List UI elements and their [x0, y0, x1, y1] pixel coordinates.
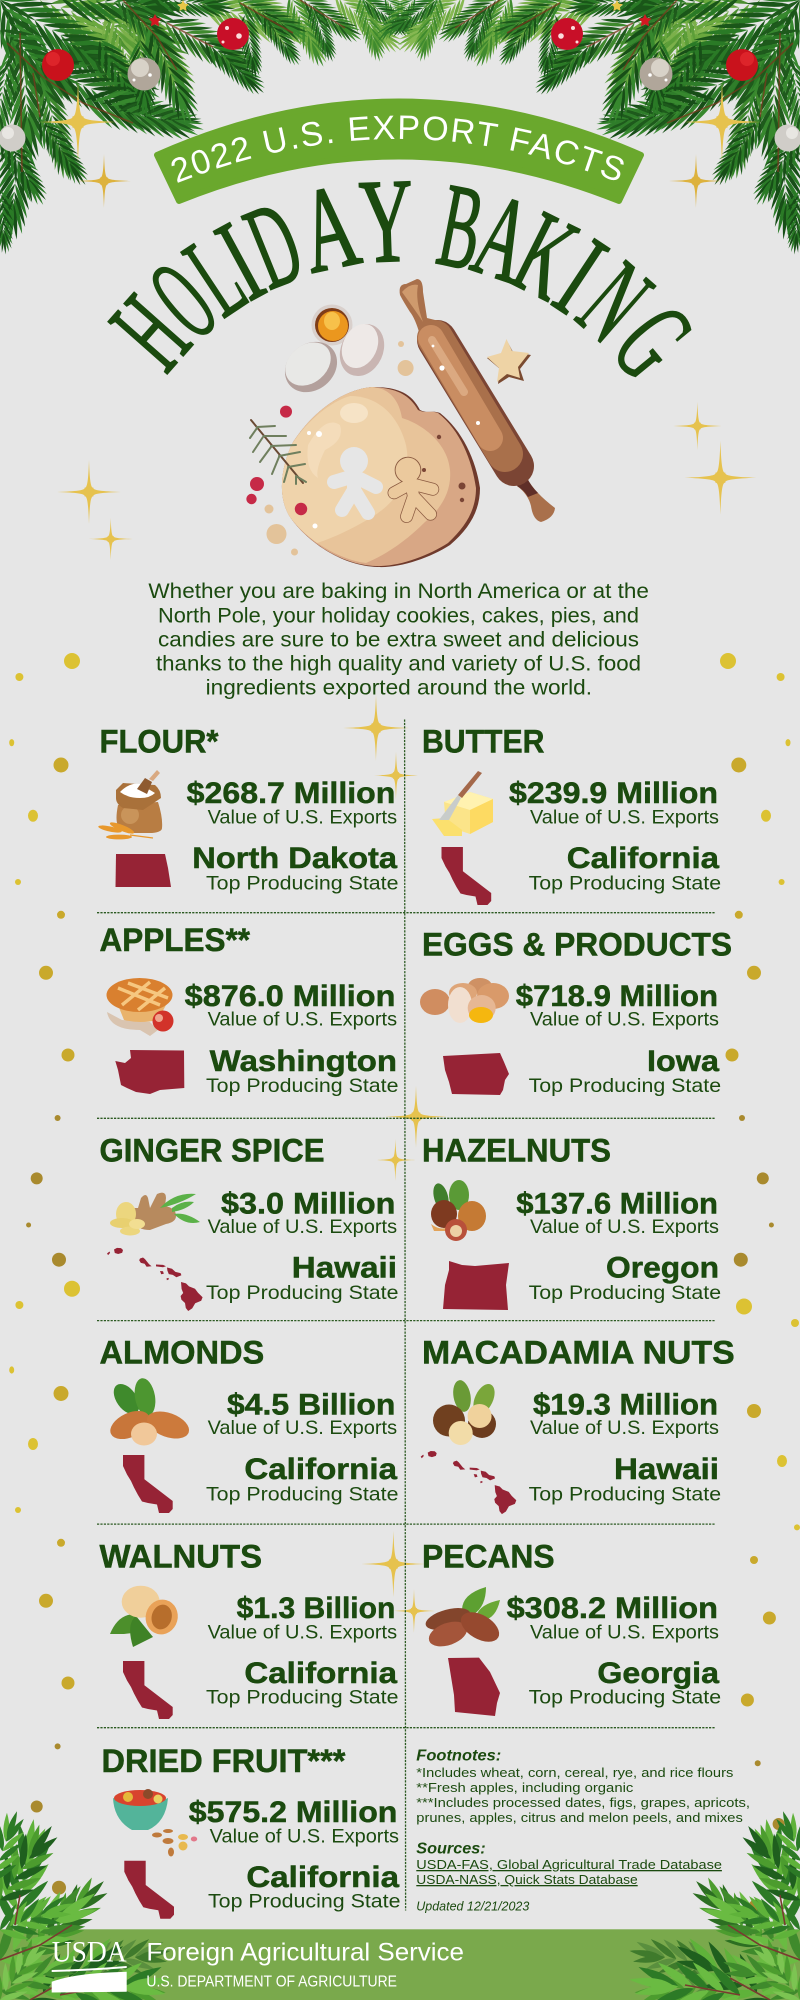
sources heading: Sources: — [416, 1840, 486, 1857]
label: Value of U.S. Exports — [530, 1622, 719, 1644]
panel: macadamia nuts — [421, 1335, 735, 1514]
label: Top Producing State — [529, 1075, 721, 1097]
heading: WALNUTS — [100, 1539, 262, 1575]
label: Top Producing State — [206, 872, 398, 894]
state map — [124, 1861, 174, 1919]
label: Top Producing State — [206, 1484, 398, 1506]
gold sparkles — [57, 402, 756, 1633]
source links — [416, 1857, 722, 1887]
state name: Oregon — [606, 1252, 719, 1284]
state name: Hawaii — [292, 1252, 397, 1284]
state map — [107, 1248, 203, 1311]
label: Value of U.S. Exports — [208, 806, 397, 828]
ornament: silver bauble — [128, 58, 160, 90]
title: holiday baking: Y — [357, 153, 416, 289]
logo swoosh — [52, 1966, 127, 1992]
title: holiday baking: I — [534, 215, 627, 338]
title: holiday baking: B — [429, 157, 494, 296]
value: $4.5 Billion — [227, 1388, 395, 1421]
egg: white — [275, 331, 347, 403]
label: Value of U.S. Exports — [208, 1417, 397, 1439]
state name: Washington — [210, 1045, 397, 1078]
label: Top Producing State — [529, 872, 721, 894]
title: holiday baking: K — [495, 185, 597, 325]
label: Value of U.S. Exports — [530, 1417, 719, 1439]
icon: butter — [432, 771, 493, 836]
panel: flour — [98, 724, 398, 894]
ornament: gold star — [177, 0, 189, 11]
title: holiday baking: D — [229, 174, 319, 315]
footnote lines: ***Includes processed dates, figs, grapes, apricots, — [416, 1795, 750, 1810]
label: Value of U.S. Exports — [530, 1008, 719, 1030]
dough — [282, 387, 480, 567]
gold glitter dots — [9, 653, 800, 1912]
heading: PECANS — [422, 1539, 555, 1575]
state map — [421, 1451, 516, 1514]
state map — [115, 1050, 184, 1094]
gingerbread outline — [387, 453, 438, 521]
label: Top Producing State — [529, 1687, 721, 1709]
panel: walnuts — [100, 1539, 398, 1719]
state name: California — [244, 1453, 397, 1486]
state name: California — [246, 1861, 399, 1894]
footnote lines: *Includes wheat, corn, cereal, rye, and rice flours — [416, 1765, 734, 1780]
footer band — [0, 1929, 800, 2000]
banner ribbon — [157, 102, 641, 201]
intro text: thanks to the high quality and variety of U.S. food — [156, 652, 641, 676]
icon: dried fruit bowl — [113, 1789, 197, 1856]
ornament: red bauble — [42, 49, 74, 81]
banner — [154, 98, 644, 204]
updated date: Updated 12/21/2023 — [416, 1900, 529, 1914]
ornaments: left — [0, 0, 249, 208]
banner text: 2022 U.S. EXPORT FACTS — [172, 116, 624, 183]
garland: top left — [0, 0, 430, 256]
footnote lines — [416, 1765, 750, 1825]
heading: ALMONDS — [100, 1335, 264, 1371]
state map — [123, 1455, 173, 1513]
title: holiday baking: A — [459, 167, 547, 308]
heading: EGGS & PRODUCTS — [422, 926, 732, 962]
icon: pecans — [423, 1587, 504, 1651]
heading: FLOUR* — [100, 724, 219, 760]
label: Top Producing State — [206, 1687, 398, 1709]
state map — [442, 847, 491, 905]
state name: Georgia — [597, 1657, 719, 1690]
foliage: bottom left — [0, 1804, 175, 2000]
illustration: dough and rolling pin — [246, 279, 555, 567]
cookie star — [487, 339, 531, 384]
label: Value of U.S. Exports — [208, 1008, 397, 1030]
ornaments: right — [551, 0, 800, 208]
agency name: Foreign Agricultural Service — [146, 1939, 464, 1967]
state name: Hawaii — [614, 1453, 719, 1486]
heading: MACADAMIA NUTS — [422, 1335, 735, 1371]
panel: dried fruit — [102, 1743, 400, 1919]
value: $575.2 Million — [189, 1796, 397, 1829]
footnote lines: prunes, apples, citrus and melon peels, and mixes — [416, 1810, 743, 1825]
source links: USDA-FAS, Global Agricultural Trade Database — [416, 1857, 722, 1872]
sprig — [250, 420, 306, 484]
title: holiday baking: N — [555, 237, 676, 367]
panel: hazelnuts — [422, 1132, 721, 1310]
label: Top Producing State — [206, 1075, 398, 1097]
label: Value of U.S. Exports — [208, 1216, 397, 1238]
ornament: red star — [148, 14, 162, 26]
icon: walnuts — [110, 1586, 182, 1647]
sparkle — [38, 81, 118, 163]
department name: U.S. DEPARTMENT OF AGRICULTURE — [146, 1973, 397, 1990]
egg: white — [332, 317, 392, 383]
footnote lines: **Fresh apples, including organic — [416, 1780, 634, 1795]
footer — [52, 1936, 464, 1992]
footnotes heading: Footnotes: — [416, 1747, 501, 1764]
value: $308.2 Million — [507, 1592, 718, 1625]
value: $19.3 Million — [533, 1388, 718, 1421]
panel: pecans — [422, 1539, 721, 1716]
icon: ginger — [110, 1193, 200, 1236]
label: Top Producing State — [529, 1282, 721, 1304]
intro text — [148, 580, 649, 700]
title: holiday baking: O — [126, 238, 240, 362]
value: $3.0 Million — [221, 1187, 395, 1220]
intro text: Whether you are baking in North America or at the — [148, 580, 649, 603]
icon: almonds — [106, 1377, 193, 1446]
value: $876.0 Million — [185, 980, 395, 1013]
label: Top Producing State — [208, 1891, 400, 1913]
logo: USDA — [52, 1936, 127, 1992]
panel: butter — [422, 724, 721, 905]
title: holiday baking: G — [588, 282, 719, 401]
value: $239.9 Million — [509, 777, 718, 810]
state name: North Dakota — [192, 842, 397, 875]
title: holiday baking: A — [289, 157, 369, 299]
panel: ginger spice — [100, 1132, 398, 1311]
berries — [246, 406, 307, 515]
title: holiday baking — [85, 153, 719, 401]
heading: GINGER SPICE — [100, 1132, 324, 1168]
garland: top right — [370, 0, 800, 256]
logo wordmark: USDA — [52, 1936, 127, 1969]
ornament: checked silver bauble — [0, 124, 26, 152]
state map — [116, 854, 171, 887]
label: Top Producing State — [529, 1484, 721, 1506]
ornament: red snowflake bauble — [217, 18, 249, 50]
state name: California — [244, 1657, 397, 1690]
value: $718.9 Million — [516, 980, 718, 1013]
state map — [443, 1261, 509, 1310]
icon: macadamia nuts — [433, 1379, 499, 1445]
state name: Iowa — [647, 1045, 719, 1078]
sparkle — [77, 154, 131, 208]
gingerbread cutout — [334, 447, 376, 513]
label: Value of U.S. Exports — [530, 806, 719, 828]
label: Value of U.S. Exports — [530, 1216, 719, 1238]
label: Value of U.S. Exports — [210, 1826, 399, 1848]
foliage: bottom right — [625, 1804, 800, 2000]
heading: APPLES** — [100, 922, 251, 958]
value: $1.3 Billion — [237, 1592, 395, 1625]
heading: DRIED FRUIT*** — [102, 1743, 346, 1779]
egg: cracked with yolk — [312, 304, 352, 346]
icon: apple pie — [106, 978, 174, 1036]
state map — [123, 1661, 173, 1719]
heading: HAZELNUTS — [422, 1132, 611, 1168]
icon: eggs — [420, 978, 509, 1023]
rolling pin — [400, 279, 555, 522]
dividers — [97, 720, 715, 1910]
state name: California — [567, 842, 719, 875]
panel: almonds — [100, 1335, 398, 1513]
heading: BUTTER — [422, 724, 544, 760]
panel: eggs and products — [420, 926, 732, 1097]
icon: flour sack — [98, 770, 162, 839]
source links: USDA-NASS, Quick Stats Database — [416, 1872, 638, 1887]
state map — [443, 1053, 509, 1095]
intro text: ingredients exported around the world. — [206, 677, 592, 700]
title: holiday baking: H — [85, 272, 214, 393]
label: Top Producing State — [206, 1282, 398, 1304]
crumbs — [264, 341, 414, 556]
value: $268.7 Million — [187, 777, 395, 810]
label: Value of U.S. Exports — [208, 1622, 397, 1644]
title: holiday baking: L — [164, 211, 267, 341]
intro text: North Pole, your holiday cookies, cakes, pies, and — [158, 604, 639, 627]
intro text: candies are sure to be extra sweet and delicious — [158, 628, 639, 651]
value: $137.6 Million — [516, 1187, 718, 1220]
title: holiday baking: I — [198, 198, 282, 325]
icon: hazelnuts — [431, 1180, 486, 1241]
state map — [448, 1658, 500, 1716]
footnotes — [416, 1747, 750, 1914]
panel: apples — [100, 922, 398, 1097]
